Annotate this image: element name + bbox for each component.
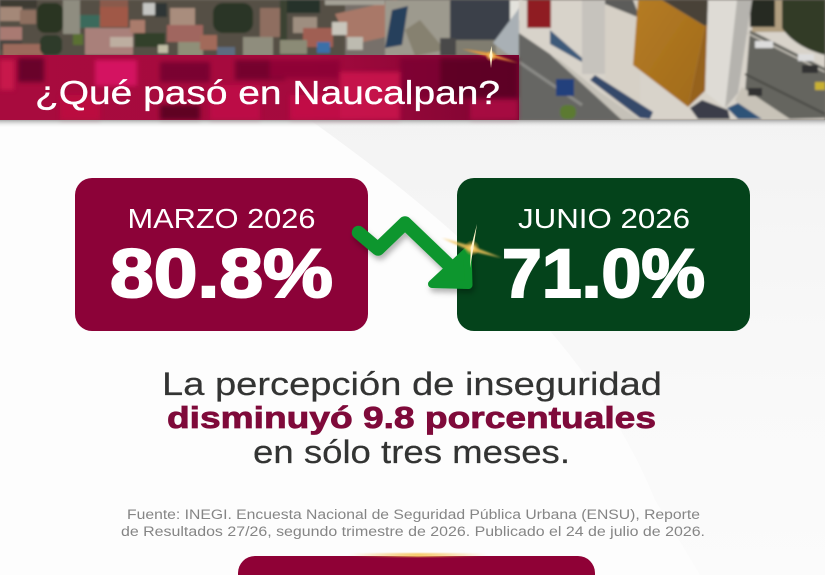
highlighted statement: disminuyó 9.8 porcentuales — [167, 400, 656, 435]
arrow: downward trend — [358, 223, 468, 285]
photo: neighbourhood rooftops — [0, 0, 397, 58]
panel: marzo 2026 — [75, 178, 368, 331]
photo: right roads and trees — [605, 0, 640, 18]
statement text: en sólo tres meses. — [253, 434, 570, 470]
arrow flare — [442, 224, 502, 268]
junio label: JUNIO 2026 — [518, 203, 690, 234]
banner flare — [462, 46, 518, 68]
junio value: 71.0% — [502, 235, 705, 312]
photo: tall column — [705, 0, 752, 108]
bottom button — [238, 553, 595, 575]
photo: vacant lot and tower base — [385, 0, 525, 58]
source note: de Resultados 27/26, segundo trimestre de 2026. Publicado el 24 de julio de 2026. — [121, 524, 705, 539]
photo: sidewalk strip beside the road — [552, 56, 640, 120]
photo: gold tower — [633, 0, 705, 107]
button glow — [348, 553, 488, 557]
source note: Fuente: INEGI. Encuesta Nacional de Seguridad Pública Urbana (ENSU), Reporte — [127, 507, 700, 522]
marzo label: MARZO 2026 — [128, 203, 316, 234]
photo: left road — [519, 33, 622, 120]
title banner — [0, 46, 519, 120]
photo: white column — [582, 0, 605, 74]
marzo value: 80.8% — [110, 235, 333, 312]
header photo: aerial view of Naucalpan — [0, 0, 825, 120]
header shadow — [0, 120, 825, 128]
source note — [121, 507, 705, 539]
statement text: La percepción de inseguridad — [162, 366, 662, 402]
statement text — [162, 366, 662, 470]
photo: avenue and monumental towers — [519, 0, 825, 120]
panel: junio 2026 — [457, 178, 750, 331]
title: ¿Qué pasó en Naucalpan? — [35, 74, 500, 111]
